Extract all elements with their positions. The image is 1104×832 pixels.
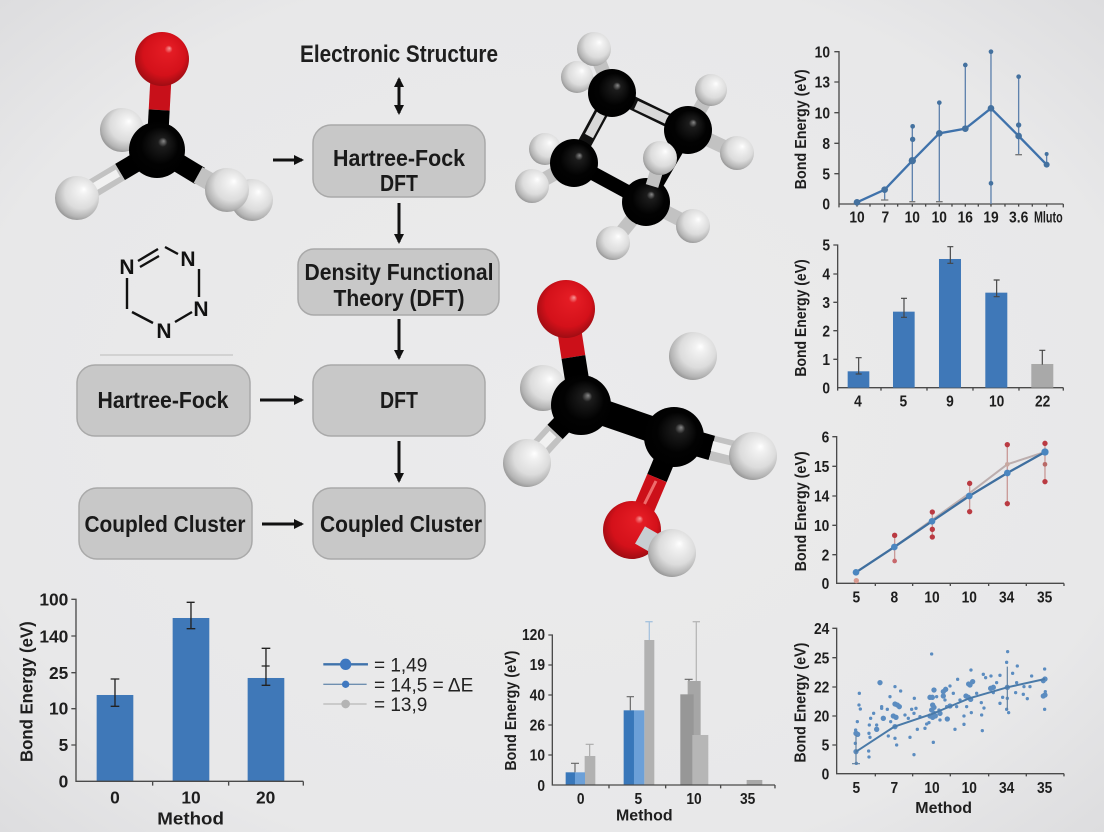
chart: bottom-center grouped bar chart bbox=[503, 622, 775, 825]
chart: bottom-center grouped bar chart: 0 bbox=[537, 778, 545, 795]
chart: top-right line chart with error bars: 19 bbox=[983, 209, 999, 226]
chart: top-right line chart with error bars: 16 bbox=[958, 209, 973, 226]
chart: top-right line chart with error bars: 7 bbox=[881, 209, 889, 226]
box: Density Functional Theory bbox=[298, 249, 499, 315]
chart: bottom-left bar chart: 25 bbox=[49, 663, 68, 683]
chart: right bar chart: 0 bbox=[822, 381, 830, 398]
chart: top-right line chart with error bars: 10 bbox=[932, 209, 947, 226]
arrow: Coupled Cluster to Coupled Cluster bbox=[262, 522, 302, 526]
chart: top-right line chart with error bars: 10 bbox=[815, 105, 830, 122]
chart: right bar chart: 9 bbox=[946, 394, 954, 411]
chart: right scatter plot with trend line: 34 bbox=[999, 780, 1015, 797]
chart: bottom-center grouped bar chart: 120 bbox=[522, 627, 545, 644]
chart: top-right line chart with error bars: 10 bbox=[849, 209, 865, 226]
chart: right scatter plot with trend line: 7 bbox=[890, 780, 898, 797]
arrow: down to Density Functional Theory bbox=[398, 203, 400, 242]
chart: bottom-center grouped bar chart: 10 bbox=[530, 748, 545, 765]
molecule: center-right glycolaldehyde bbox=[503, 280, 777, 577]
chart: top-right line chart with error bars: 10 bbox=[815, 45, 830, 62]
chart: bottom-center grouped bar chart: Method bbox=[616, 808, 673, 825]
chart: top-right line chart with error bars: Bond Energy (eV) bbox=[793, 69, 810, 189]
chart: bottom-left bar chart: 140 bbox=[39, 626, 68, 646]
chart: bottom-center grouped bar chart: Bond Energy (eV) bbox=[503, 651, 520, 771]
box: Hartree-Fock DFT bbox=[313, 125, 485, 197]
chart: top-right line chart with error bars: 10 bbox=[905, 209, 920, 226]
box: Density Functional Theory: Density Functional bbox=[304, 259, 494, 285]
chart: right line chart with red error points: 10 bbox=[924, 589, 940, 606]
chart: right bar chart: 10 bbox=[989, 394, 1005, 411]
chart: right scatter plot with trend line: 22 bbox=[814, 680, 830, 697]
molecule: tetrazine ring structure: N bbox=[119, 256, 135, 279]
chart: right line chart with red error points: 14 bbox=[814, 489, 830, 506]
chart: bottom-left bar chart: Method bbox=[157, 809, 224, 829]
chart: right scatter plot with trend line: 10 bbox=[962, 780, 977, 797]
chart: bottom-left bar chart bbox=[16, 590, 303, 829]
chart: right line chart with red error points: 10 bbox=[962, 589, 977, 606]
box: Hartree-Fock DFT: DFT bbox=[380, 170, 418, 196]
chart: right scatter plot with trend line: 24 bbox=[814, 621, 830, 638]
chart: right bar chart: 3 bbox=[822, 295, 830, 312]
arrow: down to DFT bbox=[398, 319, 400, 358]
chart: top-right line chart with error bars: 8 bbox=[822, 136, 830, 153]
chart: right bar chart: 5 bbox=[899, 394, 907, 411]
box: Coupled Cluster left: Coupled Cluster bbox=[84, 511, 246, 537]
chart: bottom-left bar chart: 100 bbox=[39, 590, 68, 610]
molecule: tetrazine ring structure: N bbox=[193, 298, 209, 321]
chart: bottom-center grouped bar chart: 0 bbox=[577, 791, 585, 808]
chart: bottom-center grouped bar chart: 40 bbox=[530, 687, 545, 704]
chart: top-right line chart with error bars: 13 bbox=[815, 75, 830, 92]
chart: right line chart with red error points: 15 bbox=[814, 459, 830, 476]
chart: right line chart with red error points: 35 bbox=[1037, 589, 1053, 606]
chart: right scatter plot with trend line: 25 bbox=[814, 650, 830, 667]
molecule: tetrazine ring structure: N bbox=[180, 248, 196, 271]
chart: right line chart with red error points: 6 bbox=[822, 429, 830, 446]
chart: bottom-left bar chart: 0 bbox=[59, 771, 68, 791]
chart: right bar chart: 4 bbox=[822, 267, 830, 284]
chart: right bar chart: 1 bbox=[822, 352, 830, 369]
arrow: molecule to Hartree-Fock bbox=[273, 158, 302, 162]
chart: right line chart with red error points: 2 bbox=[822, 547, 830, 564]
chart: right line chart with red error points: Bond Energy (eV) bbox=[793, 451, 810, 571]
chart: bottom-left bar chart: 20 bbox=[256, 787, 275, 807]
legend: = 13,9 bbox=[374, 695, 427, 716]
chart: right line chart with red error points: 8 bbox=[890, 589, 898, 606]
box: DFT: DFT bbox=[380, 387, 418, 413]
box: Hartree-Fock DFT: Hartree-Fock bbox=[333, 145, 465, 171]
legend: = 14,5 = ΔE bbox=[374, 676, 473, 697]
box: Coupled Cluster right bbox=[313, 488, 485, 559]
chart: top-right line chart with error bars bbox=[793, 45, 1063, 226]
box: Hartree-Fock bbox=[77, 365, 250, 436]
chart: right scatter plot with trend line: Bond Energy (eV) bbox=[792, 643, 809, 763]
chart: bottom-left bar chart: Bond Energy (eV) bbox=[16, 621, 36, 762]
chart: right bar chart: 4 bbox=[854, 394, 862, 411]
arrow: double vertical bbox=[398, 79, 400, 113]
chart: bottom-center grouped bar chart: 26 bbox=[530, 717, 545, 734]
chart: top-right line chart with error bars: 0 bbox=[822, 196, 830, 213]
molecule: top-left ball and stick bbox=[55, 32, 273, 221]
chart: bottom-center grouped bar chart: 19 bbox=[530, 657, 545, 674]
scatter points large bbox=[856, 679, 1045, 752]
chart: bottom-center grouped bar chart: 5 bbox=[634, 791, 642, 808]
arrow: Hartree-Fock to DFT bbox=[260, 398, 302, 402]
molecule: top-center cyclobutane bbox=[515, 32, 754, 260]
chart: bottom-center grouped bar chart: 10 bbox=[686, 791, 702, 808]
chart: right bar chart: Bond Energy (eV) bbox=[793, 259, 810, 377]
chart: bottom-left bar chart: 10 bbox=[181, 787, 201, 807]
chart: right bar chart bbox=[793, 238, 1063, 411]
box: Hartree-Fock: Hartree-Fock bbox=[98, 387, 229, 413]
chart: right bar chart: 22 bbox=[1035, 394, 1051, 411]
scatter points small bbox=[855, 652, 1045, 763]
chart: right scatter plot with trend line: 20 bbox=[814, 709, 830, 726]
chart: right scatter plot with trend line: 5 bbox=[822, 738, 830, 755]
chart: top-right line chart with error bars: 3.6 bbox=[1009, 209, 1029, 226]
chart: top-right line chart with error bars: 5 bbox=[822, 166, 830, 183]
chart: right scatter plot with trend line: 5 bbox=[852, 780, 860, 797]
chart: bottom-left bar chart: 10 bbox=[49, 699, 68, 719]
box: DFT bbox=[313, 365, 485, 436]
chart: bottom-left bar chart: 0 bbox=[110, 787, 120, 807]
box: Coupled Cluster right: Coupled Cluster bbox=[320, 511, 482, 537]
arrow: DFT to Coupled Cluster bbox=[398, 441, 400, 481]
chart: right line chart with red error points bbox=[793, 429, 1064, 606]
box: Density Functional Theory: Theory (DFT) bbox=[334, 285, 464, 311]
chart: right scatter plot with trend line bbox=[792, 621, 1064, 817]
chart: right line chart with red error points: 5 bbox=[852, 589, 860, 606]
chart: bottom-center grouped bar chart: 35 bbox=[740, 791, 756, 808]
chart: bottom-left bar chart: 5 bbox=[59, 735, 68, 755]
chart: right scatter plot with trend line: Method bbox=[915, 800, 972, 817]
chart: right line chart with red error points: 34 bbox=[999, 589, 1015, 606]
chart: right bar chart: 5 bbox=[822, 238, 830, 255]
legend: = 1,49 bbox=[374, 656, 427, 677]
chart: right line chart with red error points: 0 bbox=[822, 576, 830, 593]
chart: right bar chart: 2 bbox=[822, 323, 830, 340]
chart: right line chart with red error points: 10 bbox=[814, 518, 830, 535]
box: Coupled Cluster left bbox=[79, 488, 252, 559]
heading: Electronic Structure: Electronic Structure bbox=[300, 41, 498, 68]
chart: top-right line chart with error bars: Mluto bbox=[1034, 209, 1063, 226]
molecule: tetrazine ring structure bbox=[119, 247, 209, 343]
molecule: tetrazine ring structure: N bbox=[156, 320, 172, 343]
legend bbox=[323, 656, 473, 716]
chart: right scatter plot with trend line: 35 bbox=[1037, 780, 1053, 797]
chart: right scatter plot with trend line: 10 bbox=[924, 780, 940, 797]
chart: right scatter plot with trend line: 0 bbox=[822, 766, 830, 783]
